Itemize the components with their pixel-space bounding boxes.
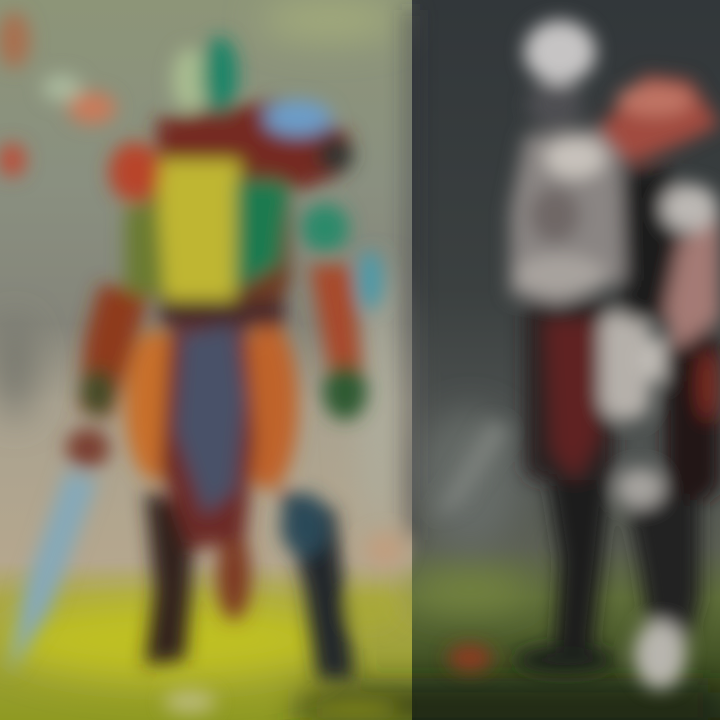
helmet crest	[172, 37, 238, 113]
left leg	[145, 490, 195, 665]
center tail	[217, 530, 251, 620]
right arm	[310, 265, 362, 375]
torso back	[150, 150, 290, 300]
right orange skirt	[238, 320, 298, 490]
feet shadow	[515, 646, 615, 674]
hip plate	[600, 310, 650, 420]
blue shoulder plate	[264, 100, 332, 136]
falling leaves top left	[0, 12, 116, 177]
sword hilt	[66, 428, 110, 468]
yellow chest	[155, 160, 240, 300]
torso left green	[125, 205, 165, 295]
skirt red border	[160, 320, 255, 550]
ground patches	[164, 532, 492, 716]
dark body right	[620, 170, 680, 320]
left arm	[78, 285, 150, 420]
right figure far leg	[625, 490, 700, 650]
figure: left colorful warrior	[8, 37, 383, 680]
sword reflection	[435, 420, 510, 515]
green chest	[235, 180, 290, 290]
red shoulder	[598, 75, 720, 165]
right figure legs	[545, 460, 612, 650]
neck	[527, 83, 583, 127]
sword blade	[8, 470, 98, 675]
white helmet	[524, 20, 596, 84]
dark red tabard	[545, 320, 600, 480]
figure: right grey warrior	[435, 20, 720, 689]
white boot	[634, 621, 686, 689]
dark lower torso	[525, 300, 615, 480]
left orange skirt	[125, 330, 185, 480]
boundary between the two panels	[404, 10, 418, 540]
right leg	[280, 490, 355, 680]
waist	[160, 295, 285, 327]
skirt blue panel	[175, 325, 245, 515]
dark shoulder tip	[317, 137, 353, 173]
red shoulders	[109, 142, 161, 202]
grey torso	[510, 125, 625, 305]
arm right	[665, 215, 720, 350]
